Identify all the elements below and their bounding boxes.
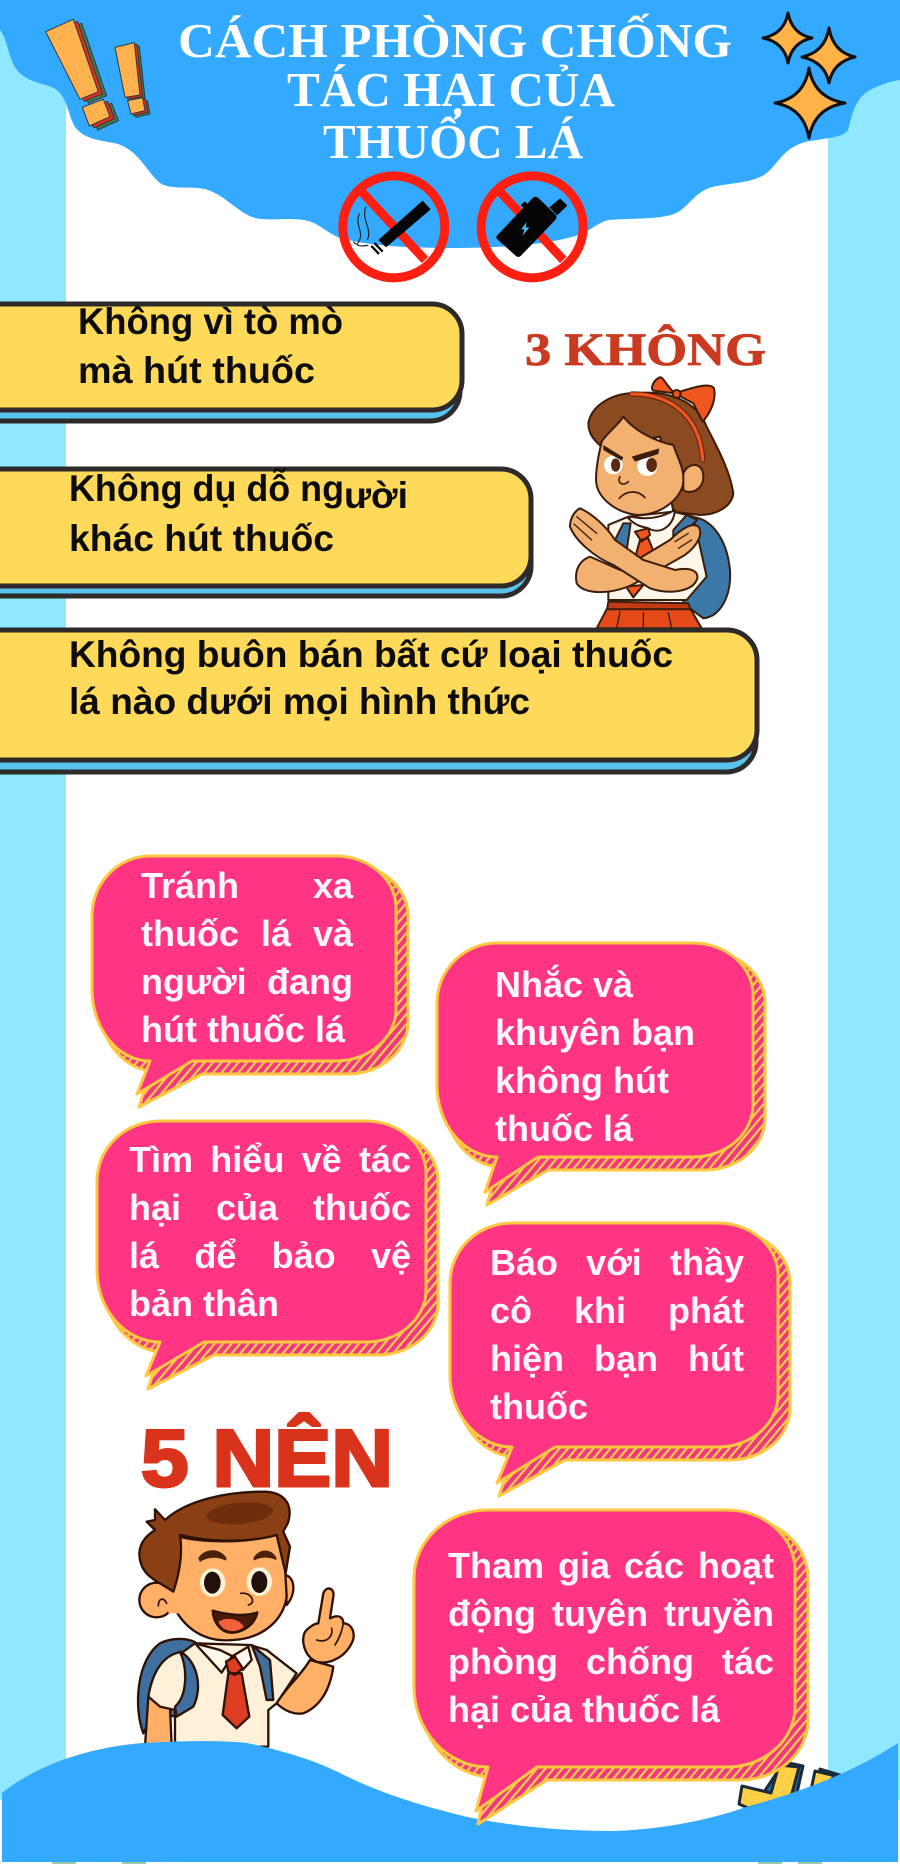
- bubble 1 text: [141, 864, 354, 1050]
- panel: 3 khong box 2: khác hút thuốc: [69, 518, 334, 559]
- bubble 5 text: hại của thuốc lá: [448, 1688, 720, 1730]
- bubble 3 text: bản thân: [129, 1282, 279, 1324]
- illustration: girl crossing arms: [570, 377, 733, 628]
- title: [178, 13, 732, 169]
- bubble 4 text: hiện bạn hút: [490, 1338, 744, 1378]
- speech bubble 1: [90, 854, 410, 1109]
- bubble 2 text: không hút: [495, 1060, 669, 1100]
- bubble 2 text: Nhắc và: [495, 964, 633, 1004]
- bubble 4 text: cô khi phát: [490, 1290, 744, 1330]
- bubble 4 text: [490, 1242, 744, 1426]
- panel: 3 khong box 1: [0, 301, 462, 421]
- title: CÁCH PHÒNG CHỐNG: [178, 13, 732, 68]
- bubble 1 text: Tránh xa: [141, 864, 353, 906]
- panel: 3 khong box 2: [0, 468, 531, 596]
- bubble 3 text: hại của thuốc: [129, 1186, 411, 1228]
- bubble 1 text: hút thuốc lá: [141, 1008, 345, 1050]
- speech bubble 2: [436, 942, 766, 1207]
- panel: 3 khong box 3: lá nào dưới mọi hình thức: [69, 681, 530, 722]
- panel: 3 khong box 2: ười: [344, 475, 408, 516]
- panel: 3 khong box 3: Không buôn bán bất cứ loại thuốc: [69, 634, 673, 675]
- bubble 5 text: [448, 1544, 774, 1730]
- title: TÁC HẠI CỦA: [287, 62, 616, 117]
- bubble 2 text: [495, 964, 695, 1148]
- bubble 1 text: thuốc lá và: [141, 912, 353, 954]
- bubble 4 text: Báo với thầy: [490, 1242, 744, 1282]
- bottom edge remnants: [52, 1862, 822, 1864]
- bubble 1 text: người đang: [141, 960, 353, 1002]
- panel: 3 khong box 1: mà hút thuốc: [78, 350, 315, 391]
- title: THUỐC LÁ: [323, 114, 584, 169]
- bubble 3 text: [129, 1138, 411, 1324]
- header cloud: [0, 0, 900, 248]
- bubble 5 text: động tuyên truyền: [448, 1592, 774, 1634]
- icon: stars: [763, 13, 855, 138]
- illustration: boy pointing up: [138, 1492, 354, 1747]
- speech bubble 3: [96, 1120, 440, 1391]
- bubble 3 text: lá để bảo vệ: [129, 1234, 411, 1276]
- icon: exclamation marks: [46, 19, 150, 130]
- bottom wave: [2, 1741, 898, 1862]
- icon: no vape: [481, 176, 583, 278]
- panel: 3 khong box 3: [0, 630, 757, 772]
- panel: 3 khong box 2: Không dụ dỗ ng: [69, 468, 344, 509]
- speech bubble 4: [448, 1222, 792, 1498]
- speech bubble 5: [412, 1508, 810, 1826]
- bubble 2 text: khuyên bạn: [495, 1012, 695, 1052]
- icon: no cigarette: [343, 176, 445, 278]
- heading: 5 nen: 5 NÊN: [141, 1412, 393, 1504]
- bubble 4 text: thuốc: [490, 1386, 588, 1426]
- bubble 3 text: Tìm hiểu về tác: [129, 1138, 411, 1180]
- bubble 5 text: Tham gia các hoạt: [448, 1544, 774, 1586]
- icon: yellow check marks: [739, 1762, 840, 1810]
- bubble 5 text: phòng chống tác: [448, 1640, 774, 1682]
- panel: 3 khong box 1: Không vì tò mò: [78, 301, 343, 342]
- bubble 2 text: thuốc lá: [495, 1108, 633, 1148]
- heading: 3 khong: 3 KHÔNG: [525, 324, 766, 376]
